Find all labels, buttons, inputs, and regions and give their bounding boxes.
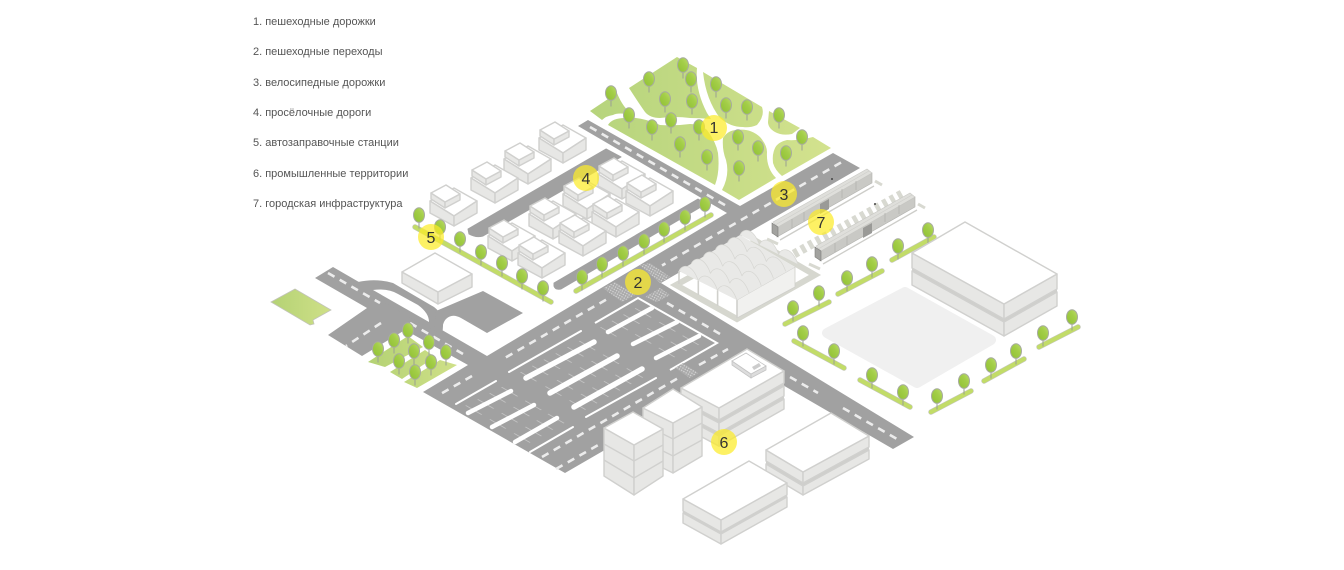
marker 4: 4 (582, 171, 591, 188)
legend: 4. просёлочные дороги (253, 107, 371, 119)
lower industrial building (683, 461, 787, 544)
trees (372, 58, 1078, 409)
tower front (604, 412, 663, 495)
legend (253, 16, 408, 210)
marker 2: 2 (634, 275, 643, 292)
marker 7: 7 (817, 215, 826, 232)
ramp (350, 280, 443, 334)
crossings (603, 263, 698, 378)
parking dividers (456, 298, 717, 452)
industrial building with roof unit (681, 349, 784, 447)
lane dashes (328, 127, 897, 469)
forecourt (434, 291, 523, 334)
marker 1 (701, 115, 727, 141)
legend: 5. автозаправочные станции (253, 137, 399, 149)
small square lawn (368, 336, 457, 388)
marker 5: 5 (427, 230, 436, 247)
central park (590, 57, 831, 200)
marker 6: 6 (720, 435, 729, 452)
marker 7 (808, 209, 834, 235)
track sleepers (794, 194, 902, 254)
legend: 7. городская инфраструктура (253, 198, 402, 210)
marker 2 (625, 269, 651, 295)
marker 1: 1 (710, 120, 719, 137)
residential houses (430, 122, 673, 278)
marker 3 (771, 181, 797, 207)
road 4 strip (468, 149, 621, 237)
hedges (415, 215, 1078, 412)
plaza (827, 292, 991, 383)
right industrial building (766, 413, 869, 495)
gas station building (402, 253, 472, 304)
legend: 1. пешеходные дорожки (253, 16, 376, 28)
marker 4 (573, 165, 599, 191)
train two (815, 193, 917, 264)
road network (315, 120, 914, 473)
parking stalls (460, 303, 707, 447)
legend: 6. промышленные территории (253, 168, 408, 180)
market pavilion (676, 230, 815, 319)
tower back (643, 389, 702, 473)
pavilion pad (676, 241, 815, 319)
legend: 3. велосипедные дорожки (253, 77, 385, 89)
marker 5 (418, 224, 444, 250)
marker 6 (711, 429, 737, 455)
trains and tracks (767, 169, 925, 269)
asphalt (315, 120, 914, 473)
tree-lined road strip (554, 199, 706, 289)
train one (772, 169, 874, 240)
marker 3: 3 (780, 187, 789, 204)
large warehouse (912, 222, 1057, 336)
legend: 2. пешеходные переходы (253, 46, 382, 58)
roof unit (732, 353, 766, 378)
parking lot lawn (271, 289, 331, 325)
